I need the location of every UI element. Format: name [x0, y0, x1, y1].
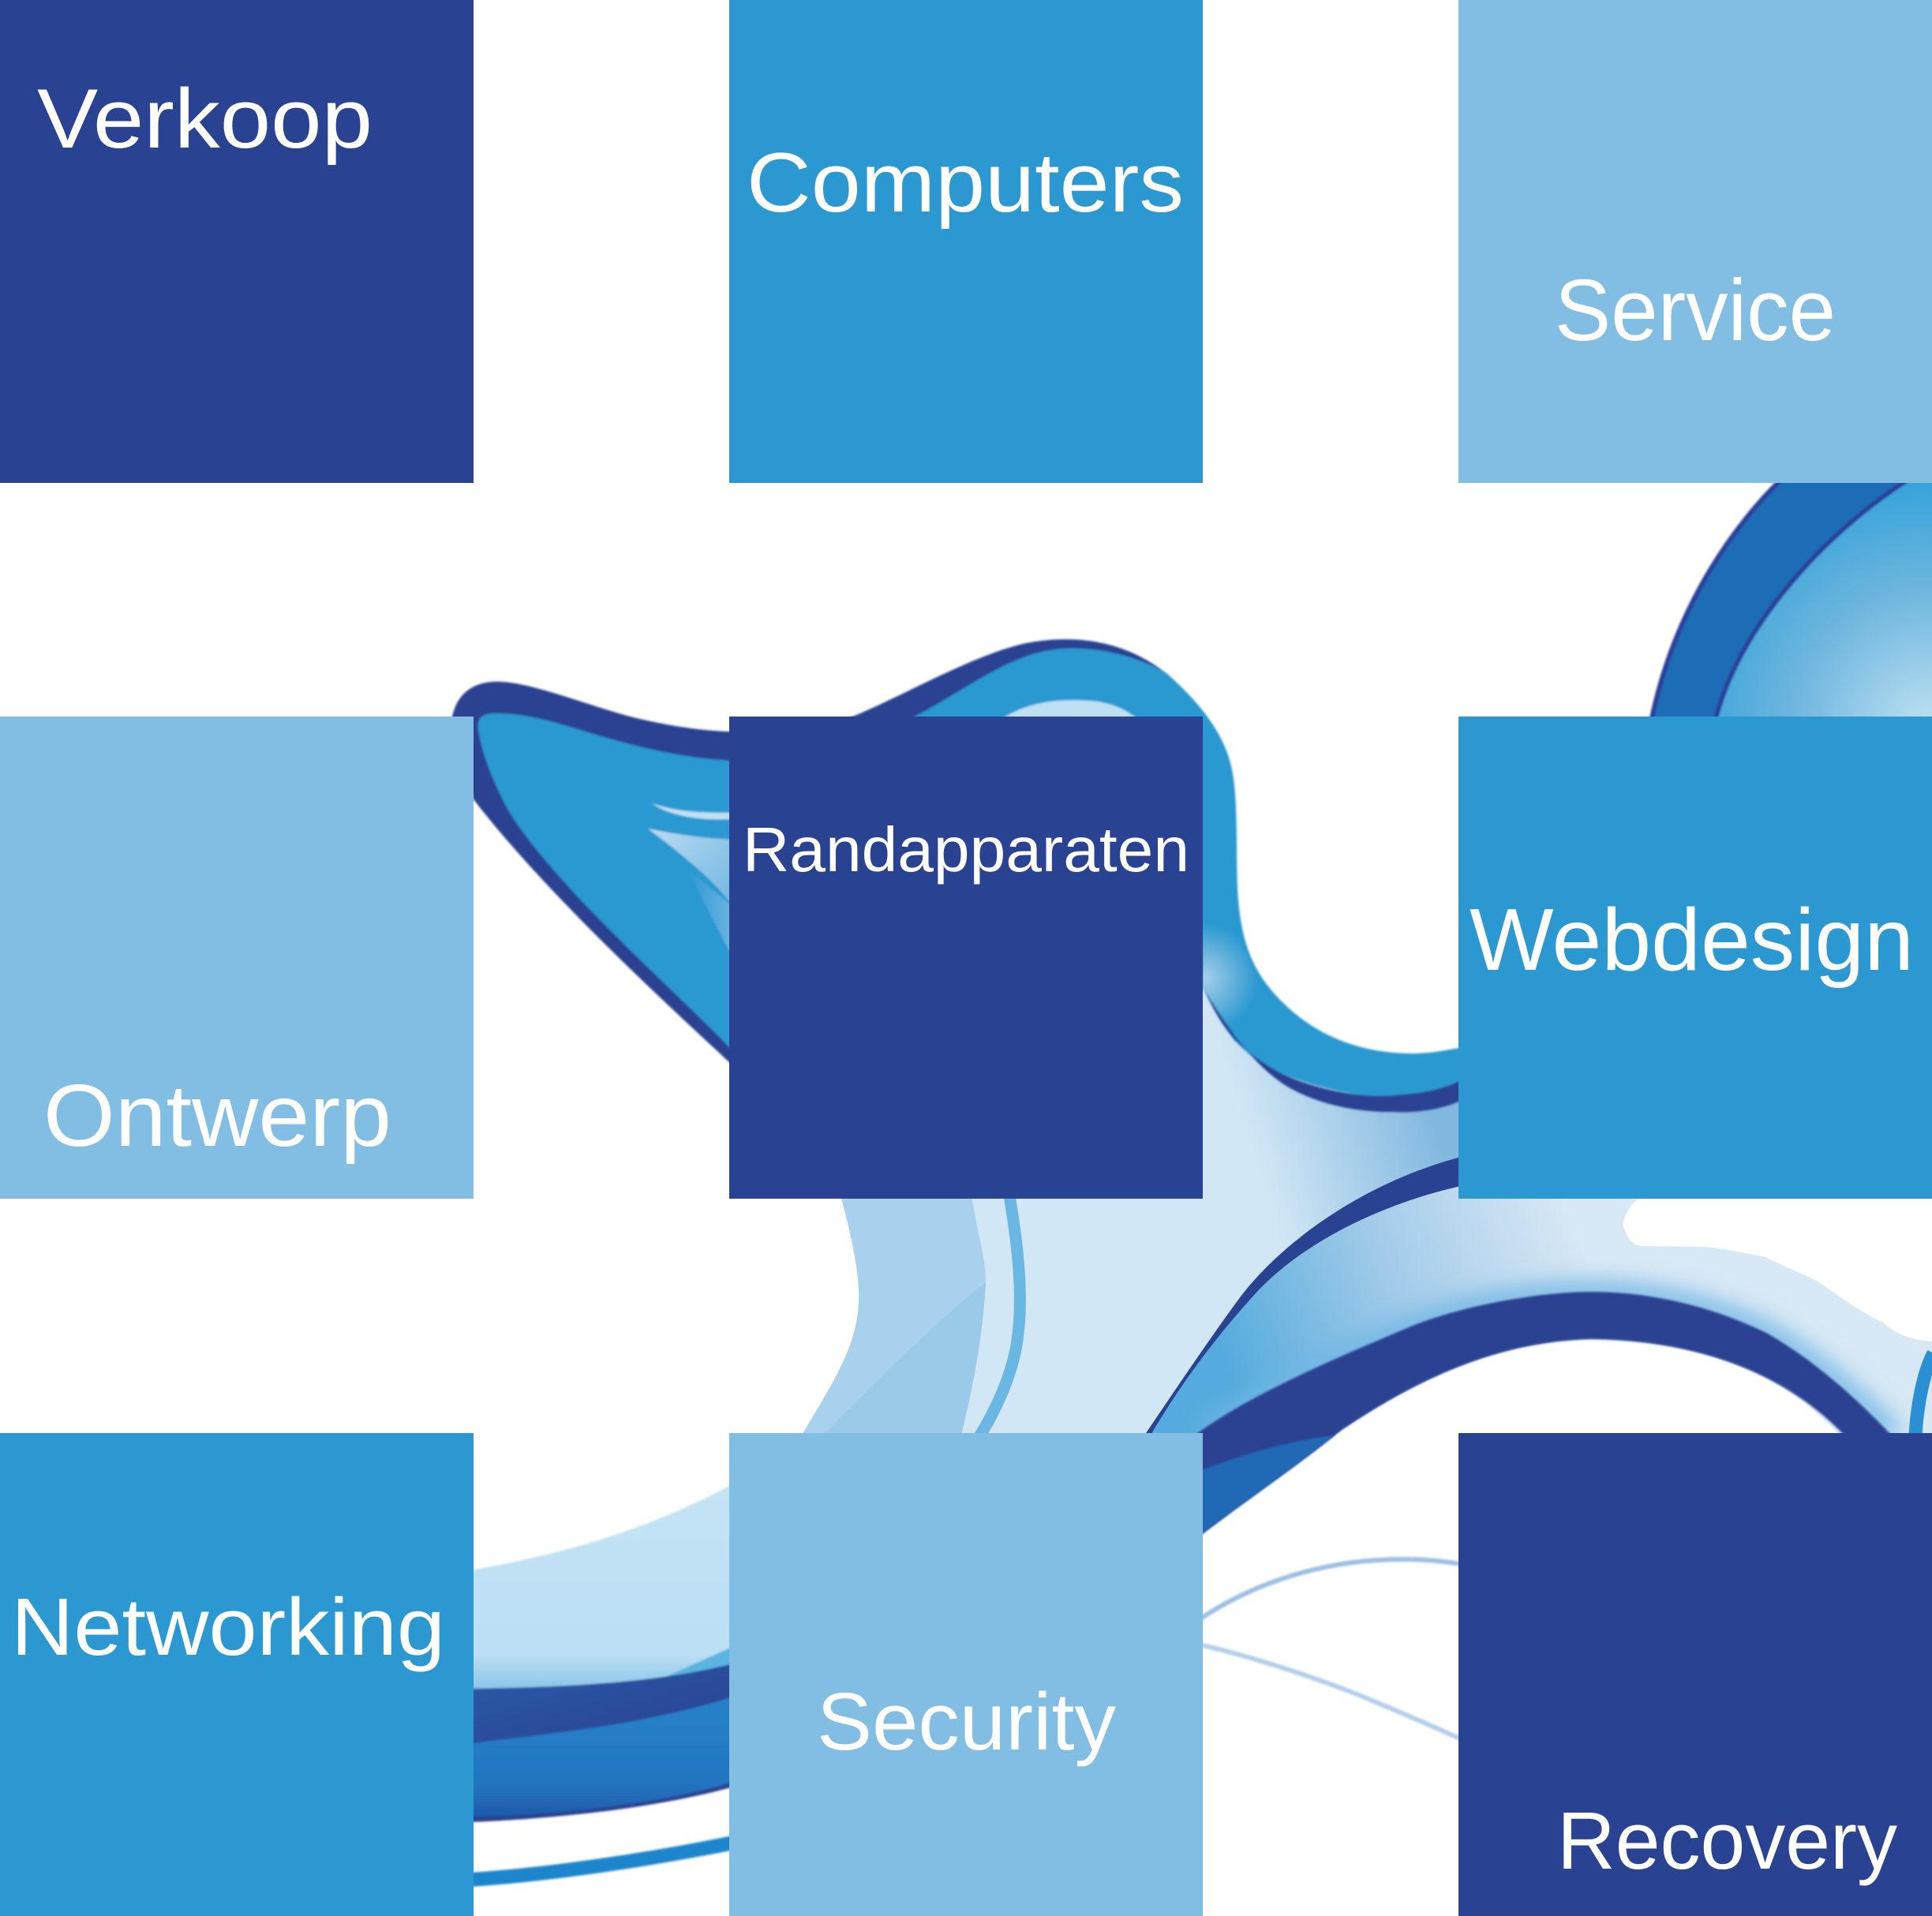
label: Randapparaten: Randapparaten	[743, 814, 1189, 885]
label: Networking: Networking	[11, 1581, 445, 1672]
left fin	[452, 682, 734, 1067]
thin curved lines	[1200, 1559, 1462, 1739]
label: Verkoop: Verkoop	[37, 71, 373, 166]
label: Recovery: Recovery	[1557, 1795, 1897, 1886]
panel: Ontwerp	[0, 717, 474, 1199]
top-right orb	[1650, 473, 1932, 726]
panel: Networking	[0, 1433, 474, 1916]
label: Service: Service	[1555, 262, 1836, 359]
panel: Recovery	[1458, 1433, 1932, 1916]
lower-left ribbon	[470, 1484, 734, 1880]
label: Computers: Computers	[747, 135, 1184, 230]
label: Security: Security	[817, 1676, 1116, 1767]
panel: Security	[729, 1433, 1203, 1916]
label: Ontwerp: Ontwerp	[43, 1067, 391, 1165]
right arm with arc	[1149, 1185, 1932, 1578]
panel: Service	[1458, 0, 1932, 483]
panel: Computers	[729, 0, 1203, 483]
second dark band	[1143, 1156, 1464, 1438]
label: Webdesign: Webdesign	[1470, 891, 1914, 989]
background swoosh logo	[452, 473, 1932, 1880]
panel: Webdesign	[1458, 717, 1932, 1199]
right fin	[844, 639, 1464, 1112]
panel: Randapparaten	[729, 717, 1203, 1199]
central body	[800, 987, 1468, 1438]
panel: Verkoop	[0, 0, 474, 483]
